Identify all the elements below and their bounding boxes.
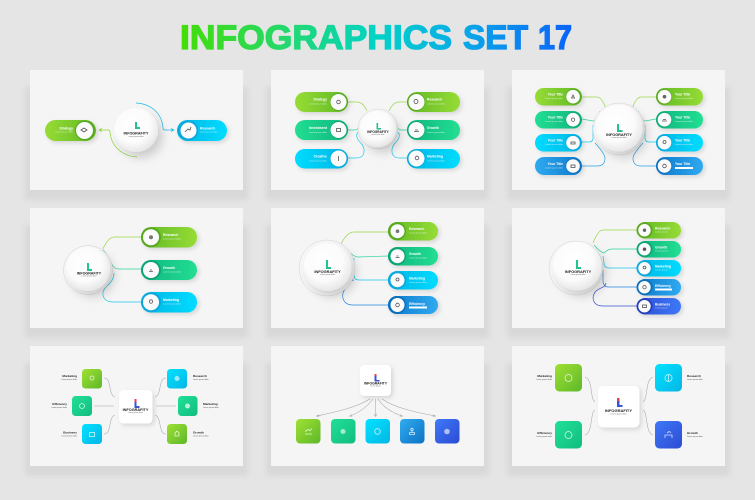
square: Marketing: Lorem ipsum dolor: [61, 378, 77, 381]
pill: Research: Lorem ipsum dolor: [163, 238, 181, 240]
connectors: [103, 237, 141, 302]
arrows: [316, 399, 436, 417]
square: Growth: Growth: [193, 430, 204, 434]
pill: Your Title 6: Lorem ipsum dolor: [675, 120, 693, 123]
arrow: blue connector: [136, 103, 174, 132]
pill: Strategy: Strategy: [313, 98, 327, 102]
icon square: cyan: [366, 419, 390, 444]
title: [180, 19, 572, 57]
pill: Research: [388, 222, 438, 240]
pill: Research: [177, 120, 227, 141]
square: Marketing: Marketing: [203, 402, 218, 406]
pill: Business: Business: [655, 302, 670, 306]
icon square: green: [296, 419, 320, 444]
square: Business: Lorem ipsum dolor: [61, 434, 77, 438]
pill: Creative: Lorem ipsum dolor: [309, 160, 327, 162]
pill: Your Title 4: Lorem ipsum dolor: [545, 166, 563, 170]
pill: Growth: Growth: [427, 126, 439, 130]
connectors: [585, 377, 653, 435]
pill: Your Title 2: [535, 111, 582, 128]
central ball: INFOGRAFITY: [565, 269, 592, 274]
square: Efficiency: Lorem ipsum dolor: [536, 435, 552, 438]
pill: Research: Lorem ipsum dolor: [427, 102, 445, 106]
pill: Strategy: Strategy: [59, 126, 73, 130]
pill: Your Title 2: Your Title: [548, 116, 563, 120]
pill: Research: [407, 92, 460, 112]
square: Marketing: [61, 369, 102, 388]
pill: Research: Research: [655, 226, 670, 230]
pill: Strategy: [295, 92, 348, 112]
pill: Growth: Lorem ipsum dolor: [409, 256, 427, 260]
pill: Your Title 1: Your Title: [548, 92, 563, 96]
connectors: [341, 232, 388, 305]
pill: Your Title 5: Your Title: [675, 92, 690, 96]
central ball: [593, 103, 645, 155]
pill: Research: [636, 222, 681, 238]
central ball: Lorem ipsum dolor: [571, 274, 586, 276]
connectors: [593, 230, 637, 306]
square: Research: [655, 364, 703, 392]
pill: Research: Research: [409, 227, 424, 231]
square: Efficiency: Efficiency: [537, 431, 552, 435]
square: Business: Business: [63, 430, 77, 434]
central ball: INFOGRAFITY: [367, 130, 390, 134]
pill: Strategy: Lorem ipsum dolor: [55, 130, 73, 134]
pill: Investment: Investment: [309, 126, 328, 130]
pill: Your Title 4: [535, 157, 582, 175]
panel: five pills right: [507, 208, 730, 338]
title: INFOGRAPHICS: [180, 19, 452, 57]
pill: Efficiency: Efficiency: [409, 302, 425, 306]
square: Growth: [167, 424, 209, 444]
pill: Growth: Growth: [163, 266, 175, 270]
pill: Marketing: Lorem ipsum: [655, 268, 668, 272]
pill: Marketing: Marketing: [409, 276, 425, 280]
panel: three pills right: [25, 208, 248, 338]
pill: Your Title 8: Your Title: [675, 162, 690, 166]
central card: INFOGRAFITY: [364, 382, 388, 386]
pill: Your Title 5: Lorem ipsum dolor: [675, 97, 693, 100]
square: Research: Lorem ipsum dolor: [193, 378, 209, 381]
square: Efficiency: [536, 421, 582, 448]
title: SET: [463, 19, 528, 57]
connectors: [348, 102, 408, 158]
pill: Research: [141, 227, 197, 248]
pill: Marketing: [636, 260, 681, 276]
pill: Growth: Lorem ipsum: [655, 250, 668, 252]
central card: [598, 386, 640, 428]
pill: Growth: Growth: [409, 252, 421, 256]
pill: Growth: Growth: [655, 246, 667, 250]
central ball: INFOGRAFITY: [314, 269, 341, 274]
pill: Research: Research: [163, 233, 178, 237]
pill: Your Title 1: [535, 88, 582, 106]
pill: Your Title 6: Your Title: [675, 116, 690, 120]
central ball: Lorem ipsum dolor: [129, 136, 144, 138]
pill: Growth: Lorem ipsum dolor: [163, 270, 181, 274]
pill: Investment: Lorem ipsum dolor: [309, 131, 327, 134]
central ball: [64, 246, 112, 294]
central ball: INFOGRAFITY: [606, 133, 632, 137]
square: Marketing: Marketing: [62, 374, 77, 378]
pill: Your Title 7: [656, 134, 703, 152]
pill: Growth: [636, 241, 681, 258]
central ball: [549, 241, 603, 295]
pill: Marketing: Marketing: [655, 264, 671, 268]
central ball: [114, 108, 158, 152]
pill: Marketing: Lorem ipsum dolor: [427, 160, 445, 162]
pill: Marketing: [141, 292, 197, 312]
pill: Marketing: Marketing: [163, 298, 179, 302]
pill: Research: Lorem ipsum: [655, 230, 668, 234]
central card: INFOGRAFITY: [123, 408, 149, 412]
pill: Your Title 8: [656, 157, 703, 175]
central card: Lorem ipsum: [370, 386, 381, 388]
pill: Growth: [407, 120, 460, 140]
pill: Research: Lorem ipsum dolor: [409, 232, 427, 234]
central ball: Lorem ipsum dolor: [82, 276, 97, 278]
pill: Marketing: [407, 149, 460, 168]
arrow: green connector: [99, 128, 137, 157]
pill: Your Title 4: Your Title: [548, 162, 563, 166]
central ball: [358, 109, 398, 149]
central ball: Lorem ipsum dolor: [612, 137, 627, 139]
central card: Lorem ipsum dolor: [610, 414, 627, 416]
pill: Research: Research: [200, 126, 215, 130]
pill: Growth: [141, 260, 197, 280]
pill: Strategy: [45, 120, 96, 141]
central card: [119, 390, 152, 424]
pill: Marketing: Marketing: [427, 154, 443, 158]
central ball: INFOGRAFITY: [124, 132, 149, 136]
square: Growth: Lorem ipsum dolor: [193, 434, 209, 438]
square: Efficiency: Lorem ipsum dolor: [51, 406, 67, 409]
square: Growth: Lorem ipsum dolor: [687, 435, 703, 438]
pill: Your Title 3: [535, 134, 582, 152]
central card: [360, 365, 391, 396]
square: Research: Research: [193, 374, 207, 378]
square: Growth: [655, 421, 703, 448]
pill: Growth: Lorem ipsum dolor: [427, 131, 445, 134]
pill: Strategy: Lorem ipsum dolor: [309, 102, 327, 106]
pill: Marketing: [388, 271, 438, 290]
pill: Efficiency: [636, 279, 681, 296]
central ball: INFOGRAFITY: [77, 272, 102, 276]
panel: four pills right: [266, 208, 489, 338]
panel: eight pill mind map: [507, 70, 730, 200]
panel: one-to-two circle diagram: [25, 70, 248, 200]
icon square: blue: [400, 419, 424, 444]
pill: Business: [636, 298, 681, 314]
pill: Your Title 5: [656, 88, 703, 106]
icon square: teal: [331, 419, 356, 444]
connectors: [94, 378, 176, 434]
icon square: indigo: [435, 419, 460, 444]
central ball: Lorem ipsum dolor: [320, 274, 335, 276]
central card: Lorem ipsum dolor: [128, 412, 143, 414]
pill: Investment: [295, 120, 348, 140]
square: Research: [167, 369, 209, 388]
pill: Efficiency: Efficiency: [655, 284, 671, 288]
pill: Marketing: Lorem ipsum dolor: [163, 302, 181, 306]
connectors: [582, 97, 656, 166]
central ball: [299, 240, 355, 296]
panel: tree with five squares: [266, 346, 489, 476]
panel: six squares: [25, 346, 248, 476]
pill: Your Title 7: Lorem ipsum dolor: [675, 143, 693, 146]
pill: Your Title 6: [656, 111, 703, 128]
pill: Your Title 3: Lorem ipsum dolor: [545, 143, 563, 146]
pill: Business: Lorem ipsum: [655, 306, 668, 310]
square: Marketing: [536, 364, 582, 392]
square: Business: [61, 424, 102, 444]
central ball: Lorem ipsum dolor: [371, 134, 385, 136]
pill: Creative: [295, 149, 348, 168]
square: Marketing: [178, 396, 219, 416]
pill: Marketing: Lorem ipsum dolor: [409, 281, 427, 284]
pill: Your Title 3: Your Title: [548, 138, 563, 142]
square: Marketing: Lorem ipsum dolor: [203, 406, 219, 409]
pill: Research: Lorem ipsum dolor: [200, 130, 218, 134]
square: Efficiency: [51, 396, 92, 416]
square: Research: Lorem ipsum dolor: [687, 378, 703, 381]
pill: Creative: Creative: [314, 154, 327, 158]
central card: INFOGRAFITY: [605, 408, 632, 413]
panel: four squares: [507, 346, 730, 476]
square: Growth: Growth: [687, 431, 698, 435]
title: 17: [538, 19, 572, 57]
pill: Your Title 2: Lorem ipsum dolor: [545, 120, 563, 123]
square: Research: Research: [687, 374, 701, 378]
square: Marketing: Marketing: [537, 374, 552, 378]
pill: Your Title 7: Your Title: [675, 138, 690, 142]
square: Efficiency: Efficiency: [52, 402, 67, 406]
pill: Growth: [388, 247, 438, 266]
pill: Research: Research: [427, 98, 442, 102]
square: Marketing: Lorem ipsum dolor: [536, 378, 552, 381]
panel: six pill mind map: [266, 70, 489, 200]
pill: Efficiency: [388, 296, 438, 314]
pill: Your Title 1: Lorem ipsum dolor: [545, 97, 563, 100]
